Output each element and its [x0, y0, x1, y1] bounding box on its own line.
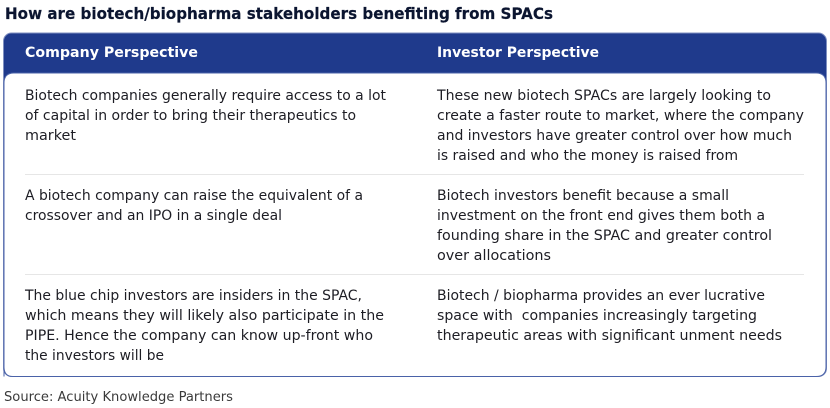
text: company row 2	[25, 188, 363, 224]
text: company row 3: which means they will likely also participate in the	[25, 308, 384, 324]
text: investor row 1	[436, 88, 804, 164]
source note: Source: Acuity Knowledge Partners	[4, 389, 233, 405]
table body	[4, 73, 826, 376]
text: investor row 2	[437, 188, 772, 264]
heading: company perspective: Company Perspective	[25, 45, 198, 61]
text: company row 2: A biotech company can raise the equivalent of a	[25, 188, 363, 204]
text: investor row 2: investment on the front end gives them both a	[437, 208, 765, 224]
text: investor row 2: Biotech investors benefit because a small	[437, 188, 729, 204]
text: investor row 1: create a faster route to market, where the company	[437, 108, 804, 124]
text: investor row 3: space with companies increasingly targeting	[437, 308, 757, 324]
text: investor row 2: founding share in the SPAC and greater control	[437, 228, 772, 244]
text: investor row 1: These new biotech SPACs are largely looking to	[436, 88, 771, 104]
text: investor row 3: Biotech / biopharma provides an ever lucrative	[437, 288, 765, 304]
text: company row 3: PIPE. Hence the company can know up-front who	[25, 328, 373, 344]
text: company row 2: crossover and an IPO in a single deal	[25, 208, 282, 224]
text: company row 3	[24, 288, 384, 364]
text: investor row 1: and investors have greater control over how much	[437, 128, 792, 144]
text: company row 1	[25, 88, 386, 144]
text: company row 1: Biotech companies generally require access to a lot	[25, 88, 386, 104]
text: company row 3: The blue chip investors are insiders in the SPAC,	[24, 288, 362, 304]
text: investor row 2: over allocations	[437, 248, 551, 264]
text: investor row 3	[437, 288, 782, 344]
text: company row 1: market	[25, 128, 76, 144]
title: How are biotech/biopharma stakeholders benefiting from SPACs	[5, 4, 553, 23]
text: investor row 1: is raised and who the money is raised from	[437, 148, 738, 164]
text: investor row 3: therapeutic areas with significant unment needs	[437, 328, 782, 344]
text: company row 1: of capital in order to bring their therapeutics to	[25, 108, 356, 124]
heading: investor perspective: Investor Perspective	[437, 45, 599, 61]
text: company row 3: the investors will be	[25, 348, 164, 364]
